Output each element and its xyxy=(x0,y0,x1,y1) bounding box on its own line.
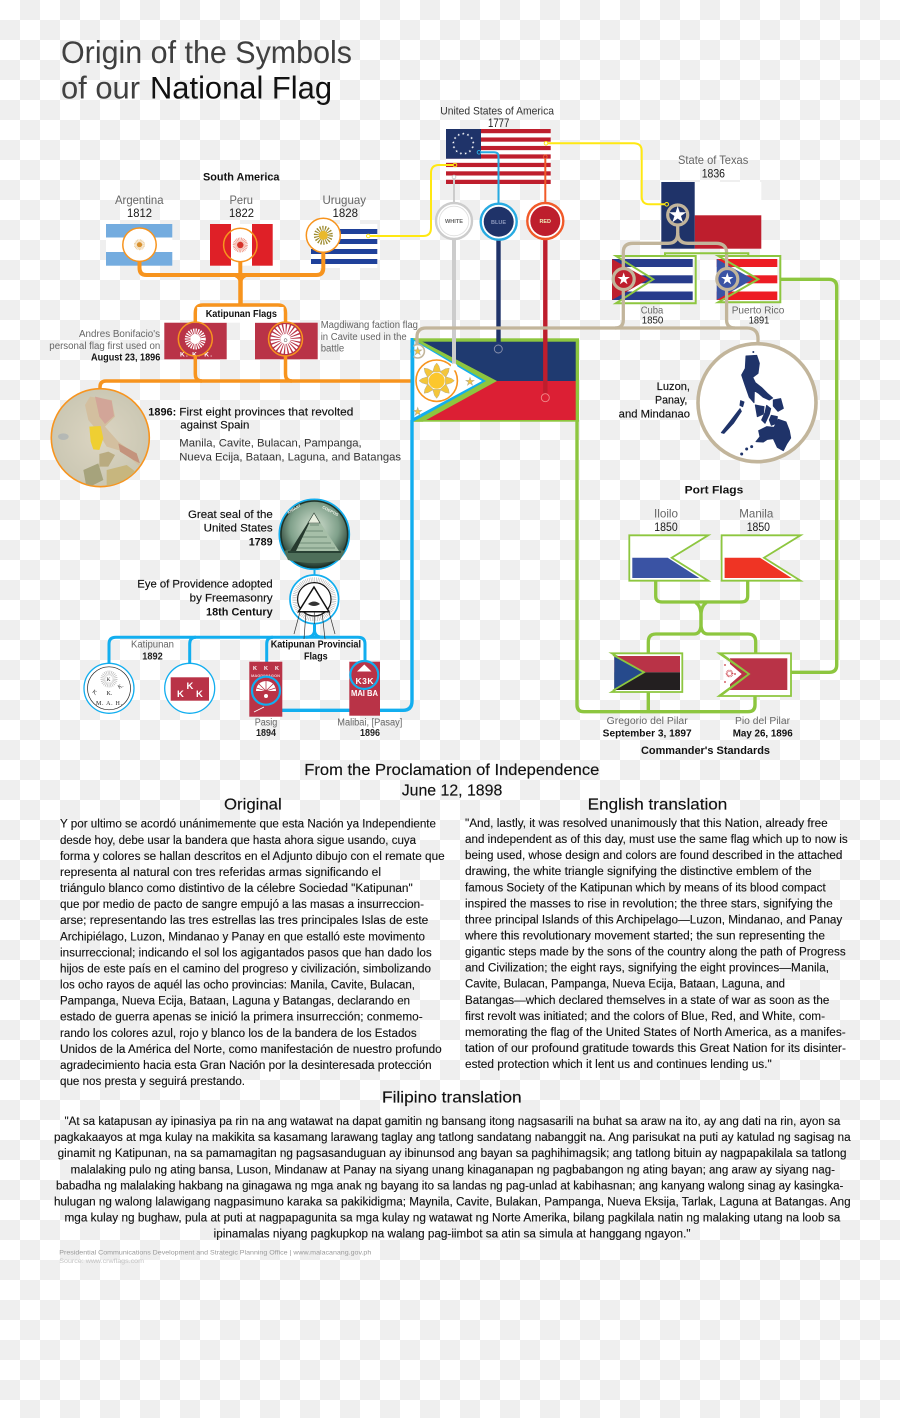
flag: Pasig: K K K xyxy=(253,666,279,672)
label: Pasig 1894: 1894 xyxy=(256,728,276,739)
flag: Katipunan Bonifacio xyxy=(164,323,227,359)
label: Argentina 1812 xyxy=(115,193,164,220)
seal: Great Seal of the United States xyxy=(279,499,349,569)
label: Manila 1850: 1850 xyxy=(747,520,770,534)
text: English translation: and Civilization; the eight rays, signifying the eight provinces—Manila, xyxy=(465,963,829,975)
label: Katipunan 1892: Katipunan xyxy=(131,640,174,651)
caption: Bonifacio flag xyxy=(49,329,161,364)
title: Origin of the Symbols xyxy=(61,34,352,70)
text: Filipino translation: "At sa katapusan ay ipinasiya pa rin na ang watawat na dapat gamitin ng bansang itong nagsasarili na buhat sa araw na ito, ay ang dati na rin, ayon sa xyxy=(64,1116,841,1128)
heading: From the Proclamation of Independence xyxy=(304,762,599,800)
label: Luzon, Panay, and Mindanao: Panay, xyxy=(655,395,687,407)
text: Filipino translation: babadha ng malalaking hakbang na ginagawa ng mga anak ng bayang ito sa landas ng pag-unlad at kabihasnan; ang kanyang walong sinag ay kasingka- xyxy=(56,1180,844,1192)
label: United States of America 1777: 1777 xyxy=(488,118,509,130)
national flag: three stars xyxy=(414,347,474,415)
star: Cuba circle xyxy=(613,268,634,290)
seal: Katipunan K.K.K. circle xyxy=(84,663,134,713)
text: 1896 first eight provinces xyxy=(148,407,402,464)
text: Filipino translation: mga kulay ng bughaw, pula at puti at nagpapagunita sa mga kulay ng watawat ng Norte Amerika, bilang pagkilala natin ng malaking utang na loob sa xyxy=(64,1213,841,1225)
text: Filipino translation: hulugan ng walong lalawigang nagpasimuno karaka sa pakikidigma; Maynila, Cavite, Bulakan, Pampanga, Nueva Eksija, Tarlak, Laguna at Batangas. Ang xyxy=(54,1196,851,1208)
text: English translation: "And, lastly, it was resolved unanimously that this Nation, already free xyxy=(465,818,828,830)
text: original Spanish: Pampanga, Nueva Ecija, Bataan, Laguna y Batangas, declarando en xyxy=(60,996,410,1008)
text: 1896 first eight provinces: Nueva Ecija, Bataan, Laguna, and Batangas xyxy=(179,452,402,464)
heading: Original: Original xyxy=(224,796,282,813)
heading: Commander's Standards: Commander's Standards xyxy=(641,745,770,757)
seal: Katipunan K.K.K. circle: M. A. H. xyxy=(96,701,122,707)
connector: green national flag to standards and Puerto Rico xyxy=(577,279,837,712)
heading: Katipunan Flags: Katipunan Flags xyxy=(206,309,277,320)
text: original Spanish: triángulo blanco como distintivo de la célebre Sociedad "Katipunan" xyxy=(60,883,413,895)
text: English translation: being used, whose design and colors are found described in the attached xyxy=(465,850,842,862)
label: Luzon, Panay, and Mindanao: Luzon, xyxy=(657,381,690,393)
flag: Peru xyxy=(210,224,273,266)
flag: Katipunan Bonifacio: K. K. K. xyxy=(180,352,212,358)
seal: Katipunan K.K.K. circle: K. xyxy=(106,691,113,697)
orange flag circles xyxy=(123,218,340,356)
label: State of Texas 1836: 1836 xyxy=(702,167,725,181)
heading: Katipunan Provincial Flags xyxy=(271,640,361,662)
heading: Katipunan Flags xyxy=(197,307,284,323)
caption: Magdiwang flag: in Cavite used in the xyxy=(321,332,407,343)
label: Katipunan 1892: 1892 xyxy=(142,651,163,662)
text: original Spanish xyxy=(60,819,445,1088)
heading: Filipino translation: Filipino translation xyxy=(382,1090,522,1107)
flag: Manila port flag xyxy=(722,535,801,581)
colour badge: blue xyxy=(477,150,517,353)
text: English translation: drawing, the white triangle signifying the distinctive emblem of the xyxy=(465,866,812,878)
label: Luzon, Panay, and Mindanao: and Mindanao xyxy=(619,408,690,420)
label: State of Texas 1836 xyxy=(678,153,748,181)
text: Filipino translation: ipinamalas niyang pagkupkop na walang pag-iimbot sa atin sa simula at hanggang ngayon." xyxy=(214,1229,690,1241)
flag: Uruguay xyxy=(306,218,377,268)
title xyxy=(61,34,352,106)
caption: Eye of Providence: 18th Century xyxy=(206,606,274,618)
text: 1896 first eight provinces: against Spain xyxy=(180,420,249,432)
text: English translation: where this revolutionary movement started; the sun representing the xyxy=(464,930,825,942)
label: Uruguay 1828: Uruguay xyxy=(322,193,366,207)
label: Manila 1850 xyxy=(739,506,774,534)
connector: cyan Eye of Providence to Katipunan flags and national flag xyxy=(109,338,412,710)
label: United States of America 1777: United States of America xyxy=(440,106,555,118)
label: Gregorio del Pilar: Gregorio del Pilar xyxy=(607,716,688,727)
colour badge: blue: BLUE xyxy=(491,220,506,226)
label: Argentina 1812: Argentina xyxy=(115,193,164,207)
title: of our xyxy=(61,70,140,106)
footer: credits: Source: www.crwflags.com xyxy=(59,1258,144,1265)
flag: Iloilo port flag xyxy=(629,535,708,581)
heading: Katipunan Provincial Flags: Flags xyxy=(304,651,328,662)
label: Iloilo 1850: 1850 xyxy=(654,520,678,534)
text: original Spanish: arse; representando las tres estrellas las tres principales Islas de este xyxy=(60,915,428,927)
flag: Malibai: K 3 K xyxy=(356,676,374,686)
label: Luzon, Panay, and Mindanao xyxy=(619,381,690,420)
label: Pasig 1894: Pasig xyxy=(255,718,277,729)
text: English translation: Cavite, Bulacan, Pampanga, Nueva Ecija, Bataan, Laguna, and xyxy=(465,979,785,991)
label: Gregorio del Pilar: September 3, 1897 xyxy=(603,729,692,740)
colour badge: red: RED xyxy=(540,219,551,225)
text: English translation xyxy=(464,818,848,1071)
label: Puerto Rico 1891: 1891 xyxy=(749,314,769,326)
label: Manila 1850: Manila xyxy=(739,506,774,520)
caption: Bonifacio flag: Andres Bonifacio's xyxy=(79,329,160,340)
label: Cuba 1850 xyxy=(641,304,663,326)
caption: Bonifacio flag: personal flag first used on xyxy=(49,341,160,352)
heading: From the Proclamation of Independence: From the Proclamation of Independence xyxy=(304,762,599,779)
seal: Katipunan K.K.K. circle: K. xyxy=(91,689,99,697)
seal: Katipunan K.K.K. circle: K xyxy=(106,677,110,683)
heading: South America: South America xyxy=(203,172,280,184)
label: Malibai 1896: Malibai, [Pasay] xyxy=(337,718,402,729)
star: Puerto Rico circle xyxy=(717,268,738,290)
text: 1896 first eight provinces: 1896: xyxy=(148,407,176,419)
flag: Malibai: MAI BA xyxy=(351,689,378,698)
label: Peru 1822: 1822 xyxy=(229,206,254,220)
label: Argentina 1812: 1812 xyxy=(127,206,152,220)
connector: tan Texas star to Cuba, Puerto Rico, map xyxy=(411,224,758,358)
connector: orange South America to Katipunan xyxy=(100,252,418,389)
label: Puerto Rico 1891: Puerto Rico xyxy=(732,304,784,316)
text: original Spanish: Unidos de la América del Norte, como manifestación de nuestro profundo xyxy=(60,1044,442,1056)
text: English translation: tation of our profound gratitude towards this Great Nation for its disinter- xyxy=(465,1043,846,1055)
label: Iloilo 1850 xyxy=(654,506,678,534)
label: Iloilo 1850: Iloilo xyxy=(654,506,678,520)
flag: Pasig xyxy=(249,662,282,717)
colour badge: red xyxy=(527,155,563,402)
text: original Spanish: que nos presta y seguirá prestando. xyxy=(60,1076,245,1088)
text: original Spanish: agradecimiento hacia esta Gran Nación por la desinteresada protección xyxy=(60,1060,432,1072)
text: original Spanish: representa al natural con tres referidas armas significando el xyxy=(60,867,381,879)
caption: Bonifacio flag: August 23, 1896 xyxy=(91,353,161,364)
label: Pasig 1894 xyxy=(255,718,277,739)
flag: Malibai xyxy=(349,661,380,716)
flag: Katipunan K K K circle: K xyxy=(196,689,203,700)
flag: Katipunan K K K circle: K xyxy=(177,689,184,700)
caption: Eye of Providence xyxy=(137,578,274,618)
national flag of the Philippines xyxy=(411,338,579,423)
icon: Eye of Providence xyxy=(290,575,339,639)
text: original Spanish: los ocho rayos de aquél las ocho provincias: Manila, Cavite, Bulacan, xyxy=(60,980,415,992)
heading: Katipunan Provincial Flags: Katipunan Provincial xyxy=(271,640,361,651)
caption: Magdiwang flag: Magdiwang faction flag xyxy=(321,320,418,331)
seal: Katipunan K.K.K. circle: K. xyxy=(117,683,125,691)
label: Malibai 1896 xyxy=(337,718,402,739)
flag: United States 1777 xyxy=(446,129,551,184)
text: Filipino translation: ginamit ng Katipunan, na sa pamamagitan ng pagsasanduguan ay ibinunsod ang bayan sa paghihimagsik; ang tatlong bituin ay nagpapakilala sa tatlong xyxy=(58,1148,846,1160)
caption: Great seal: 1789 xyxy=(249,537,273,549)
text: 1896 first eight provinces: First eight provinces that revolted xyxy=(179,407,353,419)
text: English translation: famous Society of the Katipunan which by means of its blood compact xyxy=(465,882,827,894)
label: Gregorio del Pilar xyxy=(603,716,692,740)
label: Cuba 1850: 1850 xyxy=(642,314,663,326)
footer: credits: Presidential Communications Development and Strategic Planning Office | www.malacanang.gov.ph xyxy=(59,1250,372,1257)
label: Peru 1822 xyxy=(229,193,254,220)
flag: Texas xyxy=(661,182,761,249)
text: Filipino translation xyxy=(54,1116,851,1241)
text: Filipino translation: pagkakaayos at mga kulay na makikita sa kasamang larawang taglay ang tatlong sandatang nabanggit na. Ang parisukat na puti ay katulad ng sagisag na xyxy=(54,1132,851,1144)
heading: English translation: English translation xyxy=(588,796,727,813)
flag: Pasig: MAGDIWAGON xyxy=(251,674,280,678)
text: English translation: and independent as of this day, must use the same flag which up to now is xyxy=(465,834,848,846)
connector: green port flags to commander's standards xyxy=(648,581,756,653)
label: Pio del Pilar xyxy=(733,716,793,740)
label: State of Texas 1836: State of Texas xyxy=(678,153,748,167)
caption: Great seal xyxy=(188,509,273,549)
text: original Spanish: desde hoy, debe usar la bandera que hasta ahora sigue usando, cuya xyxy=(60,835,417,847)
caption: Eye of Providence: by Freemasonry xyxy=(190,593,273,605)
heading: From the Proclamation of Independence: June 12, 1898 xyxy=(402,783,502,800)
text: 1896 first eight provinces: Manila, Cavite, Bulacan, Pampanga, xyxy=(179,438,362,450)
flag: Pio del Pilar xyxy=(719,653,791,696)
seal: Great Seal of the United States: ANNUIT xyxy=(286,503,302,515)
text: original Spanish: que por medio de pacto de sangre empujó a las masas a insurreccion- xyxy=(60,899,424,911)
text: original Spanish: estado de guerra apenas se inició la primera insurrección; conmemo- xyxy=(60,1012,423,1024)
label: Cuba 1850: Cuba xyxy=(641,304,663,316)
title: National Flag xyxy=(150,70,332,106)
flag: Katipunan K K K circle xyxy=(165,663,215,713)
flag: Puerto Rico xyxy=(717,256,780,302)
map: provinces that revolted xyxy=(51,389,149,490)
caption: Eye of Providence: Eye of Providence adopted xyxy=(137,578,273,590)
colour badge: white xyxy=(436,175,472,370)
caption: Magdiwang flag: battle xyxy=(321,344,345,355)
text: English translation: first revolt was initiated; and the colors of Blue, Red, and White, com- xyxy=(465,1011,825,1023)
text: English translation: ested protection which it lent us and continues lending us." xyxy=(465,1059,772,1071)
connector: thin green link above Cuba and Puerto Rico xyxy=(665,253,748,256)
label: Katipunan 1892 xyxy=(131,640,174,662)
national flag: sun xyxy=(416,360,457,401)
colour badge: white: WHITE xyxy=(445,219,463,225)
text: original Spanish: Y por ultimo se acordó unánimemente que esta Nación ya Independiente xyxy=(60,819,436,831)
caption: Great seal: Great seal of the xyxy=(188,509,273,521)
flag: Cuba xyxy=(612,256,696,303)
label: Puerto Rico 1891 xyxy=(732,304,784,326)
text: English translation: gigantic steps made by the sons of the country along the path of Progress xyxy=(465,947,846,959)
text: English translation: Batangas—which declared themselves in a state of war as soon as the xyxy=(465,995,829,1007)
text: original Spanish: rando los colores azul, rojo y blanco los de la bandera de los Estados xyxy=(60,1028,417,1040)
heading: Port Flags: Port Flags xyxy=(685,484,743,496)
label: Uruguay 1828: 1828 xyxy=(332,206,358,220)
flag: Gregorio del Pilar xyxy=(612,653,682,692)
text: English translation: memorating the flag of the United States of North America, as a manifes- xyxy=(465,1027,846,1039)
map: Philippines xyxy=(698,344,816,462)
text: original Spanish: forma y colores se hallan descritos en el Adjunto dibujo con el remate que xyxy=(60,851,445,863)
caption: Magdiwang flag xyxy=(321,320,418,355)
connector: yellow USA to Texas xyxy=(544,142,668,206)
flag: Magdiwang xyxy=(255,323,318,359)
label: Uruguay 1828 xyxy=(322,193,366,220)
label: Pio del Pilar: Pio del Pilar xyxy=(735,716,791,727)
text: English translation: three principal Islands of this Archipelago—Luzon, Mindanao, and Panay xyxy=(465,914,843,926)
text: original Spanish: insurreccional; indicando el sol los agigantados pasos que han dado los xyxy=(60,947,432,959)
label: Malibai 1896: 1896 xyxy=(360,728,380,739)
flag: Katipunan K K K circle: K xyxy=(186,681,194,692)
text: English translation: inspired the masses to rise in revolution; the three stars, signifying the xyxy=(465,898,833,910)
caption: Great seal: United States xyxy=(204,523,273,535)
label: Pio del Pilar: May 26, 1896 xyxy=(733,729,793,740)
seal: Great Seal of the United States: COEPTIS xyxy=(322,504,340,517)
flag: Argentina xyxy=(106,224,172,266)
label: United States of America 1777 xyxy=(440,106,555,130)
text: original Spanish: Archipiélago, Luzon, Mindanao y Panay en que estalló este movimento xyxy=(60,931,425,943)
star: Texas circle xyxy=(668,205,688,225)
label: Peru 1822: Peru xyxy=(230,193,253,207)
text: original Spanish: hijos de este país en el camino del progreso y civilización, simbolizando xyxy=(60,963,431,975)
connector: yellow stars from Uruguay to USA xyxy=(366,163,457,238)
flag: Magdiwang: ᜀ xyxy=(284,338,288,344)
footer: credits xyxy=(59,1250,372,1265)
text: Filipino translation: malalaking pulo ng ating bansa, Luson, Mindanaw at Panay na siyang unang kinaganapan ng pagbabangon ng ating bayan; ang araw ay siyang nag- xyxy=(71,1164,835,1176)
